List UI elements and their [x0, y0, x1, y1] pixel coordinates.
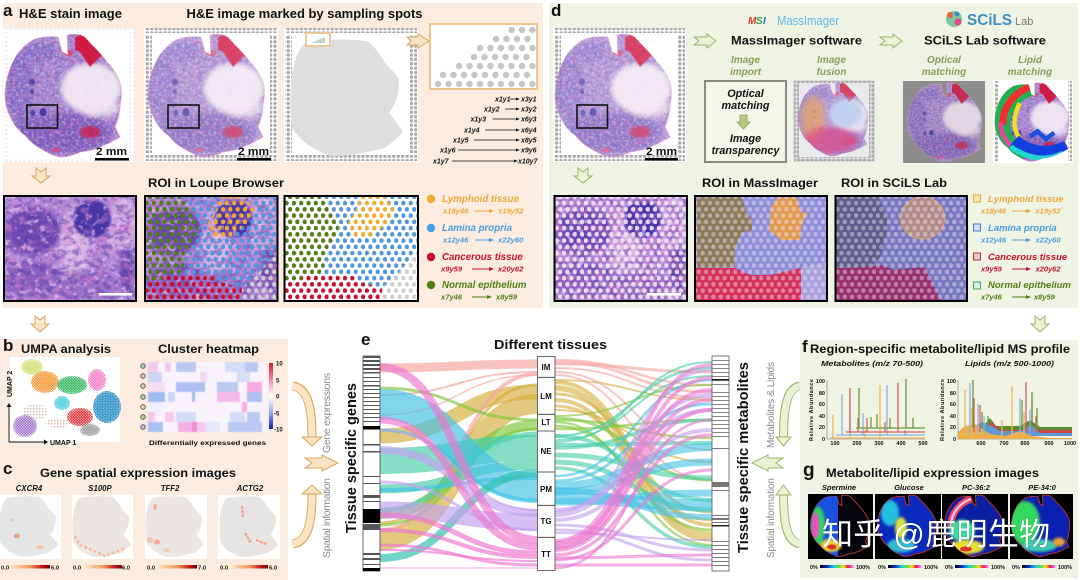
logo: SCiLS Lab [946, 11, 1033, 29]
legend: tissue types: x8y59 [495, 292, 518, 302]
color scales: 0% [1012, 565, 1020, 571]
chart: metabolites spectrum: 80 [819, 391, 825, 397]
panel label g: g [803, 460, 815, 481]
metabolite names [822, 483, 1057, 492]
chart: lipids spectrum: 100 [947, 379, 956, 385]
flows: genes to tissues [380, 364, 537, 568]
legend: tissue types: Lymphoid tissue [442, 194, 520, 205]
gene map: S100P [72, 495, 133, 559]
box: optical matching to image transparency: Optical [727, 88, 765, 100]
panel label b: b [3, 336, 13, 355]
label: Tissue specific genes: Tissue specific genes [343, 383, 360, 533]
chart: lipids spectrum: 900 [1044, 441, 1054, 447]
logo: MassImager: I [763, 16, 766, 27]
left bar: genes [363, 356, 380, 571]
step labels: Lipid [1018, 55, 1043, 66]
chart: metabolites spectrum: 20 [819, 425, 825, 431]
heading: Cluster heatmap: Cluster heatmap [158, 344, 259, 356]
panel label a: a [3, 1, 13, 20]
step labels: Image [817, 55, 846, 66]
logo: SCiLS Lab: Lab [1015, 16, 1033, 28]
watermark: 知乎 @鹿明生物 [822, 517, 1050, 552]
gene map: ACTG2 [218, 495, 280, 559]
table: sampling spot ranges: x10y7 [517, 158, 539, 166]
legend: tissue types: x18y46 [980, 206, 1007, 216]
color scales [810, 565, 1072, 571]
panel label f: f [802, 337, 808, 356]
color scales: 6.0 [122, 566, 130, 572]
center bar: tissue categories [537, 356, 555, 570]
logo: MassImager: M [748, 16, 757, 27]
arrow: metabolites and lipids curved [776, 386, 801, 446]
legend: tissue types [974, 194, 1071, 302]
legend: tissue types: Lamina propria [988, 223, 1057, 234]
legend: tissue types: x19y52 [497, 206, 524, 216]
table: sampling spot ranges: x3y1 [520, 96, 537, 104]
heatmap colorbar: 0 [276, 394, 280, 400]
panel c: gene spatial expression [0, 459, 280, 572]
color scales: 0% [878, 565, 886, 571]
chart: lipids spectrum: 40 [950, 414, 956, 420]
chart: metabolites spectrum: 100 [816, 379, 825, 385]
panel d: mass spectrometry imaging matching [549, 1, 1078, 308]
panel label e: e [361, 330, 370, 349]
flows: tissues to metabolites [555, 360, 712, 568]
metabolite names: Spermine [822, 483, 856, 492]
heading: metabolite/lipid images: Metabolite/lipid expression images [826, 468, 1039, 480]
label: Spatial information: Spatial information [321, 478, 333, 558]
legend: tissue types: x18y46 [442, 206, 469, 216]
metabolite names: Glucose [894, 483, 924, 492]
color scales: 100% [924, 565, 938, 571]
heading: UMPA analysis: UMPA analysis [21, 344, 111, 356]
gene names: CXCR4 [16, 484, 43, 493]
image: Glucose [875, 494, 941, 559]
table: sampling spot ranges: x1y2 [483, 106, 500, 114]
heading: SCiLS Lab software: SCiLS Lab software [924, 34, 1046, 48]
color scales: 100% [991, 565, 1005, 571]
table: sampling spot ranges: x1y4 [463, 128, 480, 134]
image: PC-36:2 [942, 494, 1008, 559]
heading: H&E stain image: H&E stain image [19, 7, 122, 21]
step labels: fusion [816, 67, 846, 78]
step labels: matching [1008, 67, 1052, 78]
arrow: spatial information curved [776, 485, 801, 544]
box: optical matching to image transparency: Image [730, 133, 761, 145]
image: sampling spot map [284, 28, 418, 162]
UMAP scatter plot: UMAP 1 [50, 440, 76, 447]
metabolite names: PC-36:2 [962, 483, 991, 492]
label: Gene expressions: Gene expressions [321, 373, 333, 453]
heading: MassImager software: MassImager software [731, 34, 862, 48]
arrow: spatial information curved [292, 485, 322, 544]
table: sampling spot ranges: x1y3 [470, 116, 486, 124]
label: Spatial information: Spatial information [766, 478, 777, 558]
legend: tissue types: x12y46 [980, 236, 1007, 244]
color scales: 0% [810, 565, 818, 571]
legend: tissue types: x9y59 [440, 264, 463, 274]
chart: metabolites spectrum: Relative Abundance [809, 379, 815, 441]
center bar: tissue categories: IM [542, 363, 551, 372]
chart: metabolites spectrum: 40 [819, 414, 825, 420]
color scales: 0.0 [1, 566, 9, 572]
heatmap colorbar: -10 [274, 428, 283, 434]
logo: MassImager: S [756, 16, 763, 27]
arrow: a to b [31, 316, 49, 332]
heatmap colorbar [269, 362, 283, 434]
UMAP scatter plot: UMAP 2 [7, 371, 14, 397]
chart: lipids spectrum: 600 [976, 441, 986, 447]
table: sampling spot ranges: x1y6 [439, 148, 456, 154]
arrow: out to Sankey [752, 455, 783, 471]
table: sampling spot ranges [432, 96, 539, 166]
image: optical matching [903, 80, 985, 163]
table: sampling spot ranges: x1y7 [432, 158, 450, 166]
legend: tissue types: x20y62 [1034, 264, 1061, 274]
gene map: TFF2 [145, 495, 207, 559]
table: sampling spot ranges: x6y3 [520, 116, 537, 124]
legend: tissue types [427, 194, 527, 302]
chart: lipids spectrum: 80 [950, 391, 956, 397]
step labels: import [730, 67, 762, 78]
arrow to SCiLS Lab [880, 34, 902, 48]
legend: tissue types: Normal epithelium [988, 280, 1071, 291]
legend: tissue types: x19y52 [1034, 206, 1061, 216]
legend: tissue types: Normal epithelium [442, 280, 527, 291]
chart: lipids spectrum: 1000 [1064, 441, 1076, 447]
chart: metabolites spectrum: 400 [896, 441, 906, 447]
logo: MassImager [748, 13, 840, 28]
arrow: gene expressions curved [292, 386, 322, 446]
chart: metabolites spectrum [809, 379, 928, 447]
arrow: d to f [1031, 316, 1049, 332]
legend: tissue types: x9y59 [980, 264, 1003, 274]
label: Tissue specific metabolites: Tissue specific metabolites [735, 362, 752, 553]
image: Spermine [808, 494, 873, 559]
image: H&E stain [0, 28, 134, 162]
chart: metabolites spectrum: 500 [918, 441, 928, 447]
box: optical matching to image transparency: matching [722, 100, 770, 112]
arrow to inset [407, 34, 429, 48]
panel label d: d [551, 1, 561, 20]
image: H&E with spots [550, 28, 686, 162]
color scales: 0.0 [73, 566, 81, 572]
metabolite names: PE-34:0 [1028, 483, 1057, 492]
legend: tissue types: x12y46 [442, 236, 469, 244]
table: sampling spot ranges: x1y1 [494, 96, 511, 104]
chart: metabolites spectrum: 60 [819, 402, 825, 408]
heatmap colorbar: -5 [274, 412, 280, 418]
center bar: tissue categories: TT [541, 550, 551, 559]
logo: MassImager: MassImager [777, 13, 840, 28]
chart: lipids spectrum: 700 [999, 441, 1009, 447]
label: Metabolites & Lipids: Metabolites & Lipids [766, 362, 777, 448]
heading: gene spatial expression images: Gene spatial expression images [40, 466, 236, 480]
legend: tissue types: x22y60 [1034, 236, 1061, 244]
panel e: Sankey diagram [343, 330, 752, 571]
table: sampling spot ranges: x3y2 [520, 106, 537, 114]
center bar: tissue categories: TG [540, 517, 552, 526]
panel label c: c [3, 459, 12, 478]
panel a: spatial transcriptomics sampling [0, 1, 543, 308]
ROI: H&E crop [3, 195, 137, 302]
table: sampling spot ranges: x9y6 [520, 148, 537, 154]
table: sampling spot ranges: x8y5 [520, 138, 537, 144]
image: H&E with spots: 2 mm [646, 146, 677, 158]
table: sampling spot ranges: x6y4 [520, 128, 537, 134]
panel g: expression images [803, 460, 1073, 571]
arrow: down to ROI [574, 168, 592, 183]
color scales: 0.0 [147, 566, 155, 572]
color scales: 6.0 [269, 566, 277, 572]
arrow: down to ROI [32, 168, 50, 183]
legend: tissue types: x8y59 [1033, 292, 1056, 302]
color scales: 0% [945, 565, 953, 571]
center bar: tissue categories: LM [540, 392, 552, 401]
panel b: UMAP and heatmap [3, 336, 283, 447]
color scales: 100% [856, 565, 870, 571]
box: optical matching to image transparency: transparency [712, 145, 780, 157]
step labels: Image [731, 55, 760, 66]
chart: metabolites spectrum: 300 [874, 441, 884, 447]
chart: lipids spectrum: 60 [950, 402, 956, 408]
center bar: tissue categories: LT [541, 418, 551, 427]
color scales: 100% [1058, 565, 1072, 571]
legend: tissue types: Cancerous tissue [988, 252, 1068, 263]
step labels: Optical [927, 55, 961, 66]
ROI: SCiLS Lab overlay [834, 195, 968, 302]
gene names: S100P [88, 484, 112, 493]
color scales: 0.0 [220, 566, 228, 572]
chart: lipids spectrum: 800 [1020, 441, 1030, 447]
heatmap colorbar: 10 [276, 362, 283, 368]
legend: tissue types: x7y46 [980, 292, 1003, 302]
heatmap caption: Differentially expressed genes [149, 440, 266, 447]
ROI: spots over H&E [144, 195, 278, 302]
chart: lipids spectrum [940, 379, 1076, 447]
heading: H&E image marked by sampling spots: H&E image marked by sampling spots [186, 7, 422, 21]
UMAP scatter plot [6, 357, 121, 447]
chart: lipids spectrum: Relative Abundance [940, 379, 946, 441]
color scales: 6.0 [51, 566, 59, 572]
ROI: H&E with spot holes [554, 195, 688, 302]
image: PE-34:0 [1010, 494, 1073, 559]
heatmap [148, 362, 267, 432]
gene map: CXCR4 [0, 495, 61, 559]
legend: tissue types: Lamina propria [442, 223, 513, 234]
image: fusion [793, 80, 875, 162]
color scales: 7.0 [198, 566, 206, 572]
panels b and c background [0, 339, 288, 580]
chart: metabolites spectrum: 100 [830, 441, 840, 447]
chart: metabolites spectrum: 200 [852, 441, 862, 447]
box: optical matching to image transparency [705, 81, 786, 162]
chart: metabolites spectrum: 0 [822, 437, 825, 443]
heading: region-specific profile: Region-specific metabolite/lipid MS profile [810, 344, 1070, 356]
legend: tissue types: x20y62 [497, 264, 524, 274]
subheading: lipids: Lipids (m/z 500-1000) [965, 359, 1055, 368]
gene names [16, 484, 264, 493]
legend: tissue types: x22y60 [497, 236, 524, 244]
heading: ROI in SCiLS Lab: ROI in SCiLS Lab [841, 176, 947, 190]
chart: lipids spectrum: 20 [950, 425, 956, 431]
logo: SCiLS Lab: SCiLS [967, 12, 1012, 29]
heatmap cluster markers [141, 364, 145, 429]
legend: tissue types: Lymphoid tissue [988, 194, 1064, 205]
image: H&E with sampling spots [143, 28, 278, 162]
table: sampling spot ranges: x1y5 [452, 138, 469, 144]
center bar: tissue categories: PM [540, 485, 552, 494]
legend: tissue types: x7y46 [440, 292, 463, 302]
subheading: metabolites: Metabolites (m/z 70-500) [821, 359, 924, 368]
right bar: metabolites [712, 356, 729, 571]
legend: tissue types: Cancerous tissue [442, 252, 523, 263]
color scales [1, 565, 277, 572]
ROI: spot clusters only [284, 195, 419, 302]
arrow to MassImager [694, 34, 716, 48]
panels f and g background [800, 340, 1078, 578]
heading: Different tissues: Different tissues [494, 338, 607, 352]
gene names: TFF2 [161, 484, 180, 493]
image: H&E with sampling spots: 2 mm [238, 146, 269, 158]
image: lipid matching [992, 80, 1073, 163]
ROI: MassImager overlay [694, 195, 828, 302]
heatmap colorbar: 5 [276, 378, 280, 384]
heading: ROI in MassImager: ROI in MassImager [702, 176, 818, 190]
chart: lipids spectrum: 0 [953, 437, 956, 443]
arrow: into sankey [305, 455, 338, 471]
panel f: MS profiles [802, 337, 1076, 447]
step labels: matching [922, 67, 966, 78]
step labels [730, 55, 1052, 78]
image: H&E stain: 2 mm [96, 146, 127, 158]
center bar: tissue categories: NE [540, 447, 552, 456]
gene names: ACTG2 [236, 484, 264, 493]
heading: ROI in Loupe Browser: ROI in Loupe Browser [148, 176, 284, 190]
inset: enlarged spots [430, 24, 537, 89]
